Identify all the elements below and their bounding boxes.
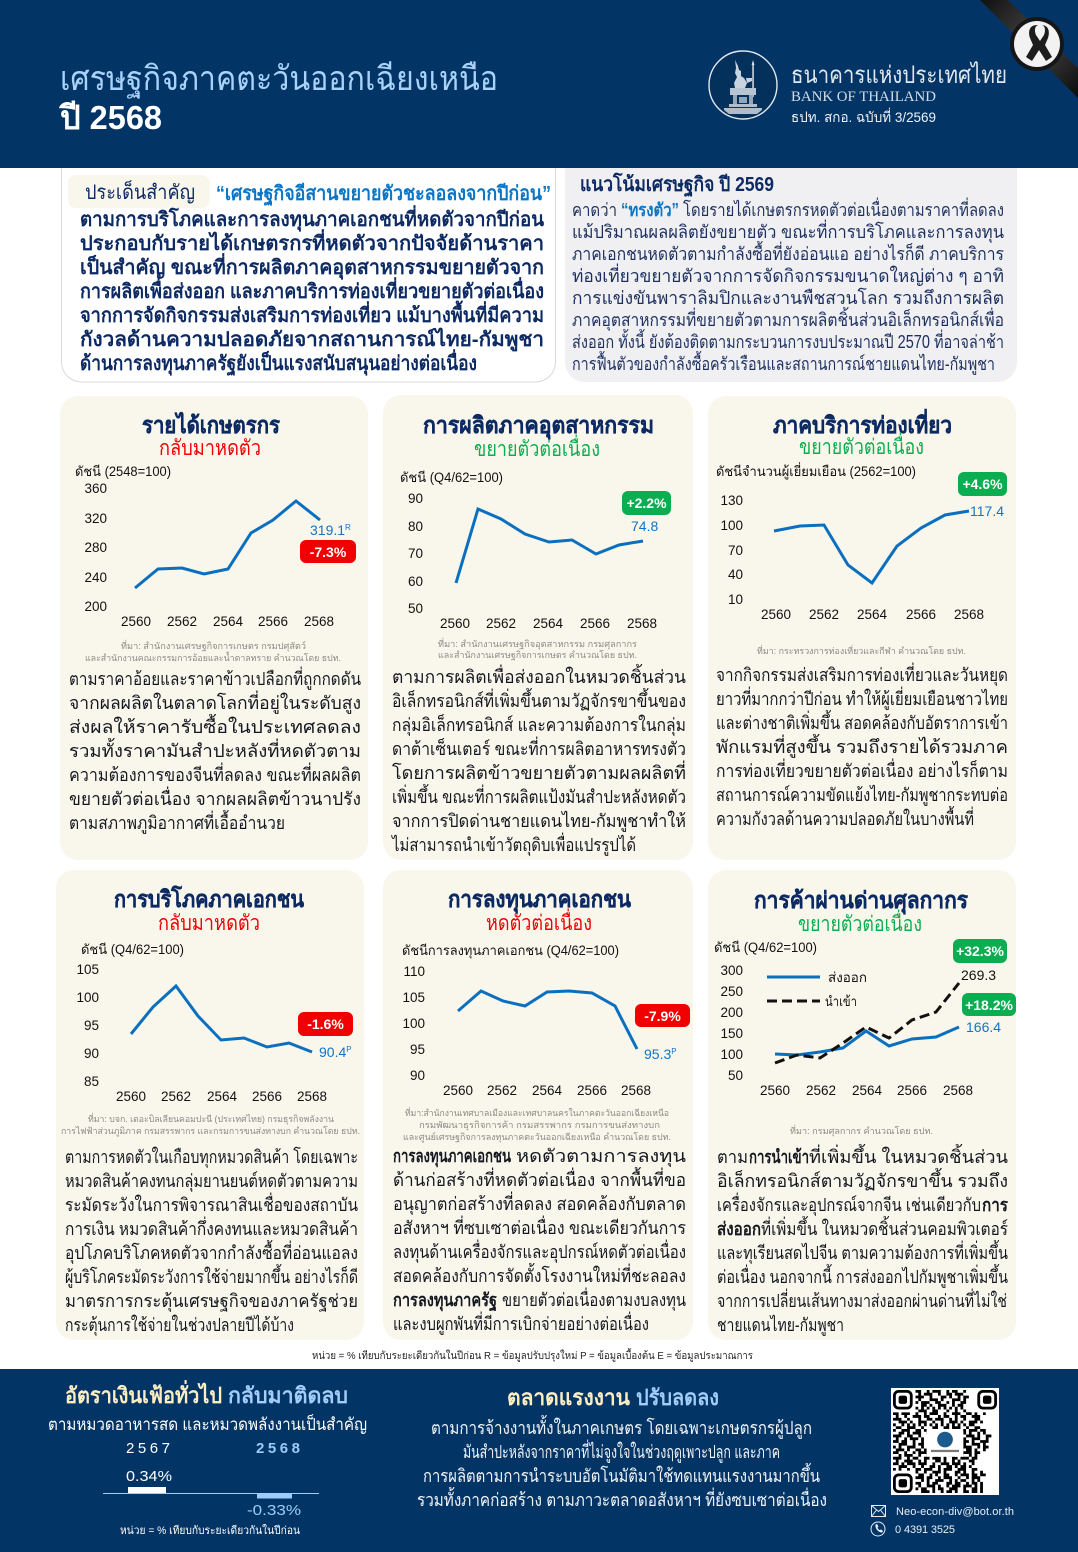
badge: plus 18.2 percent [962, 993, 1016, 1016]
body text: สถานการณ์ความขัดแย้งไทย-กัมพูชากระทบต่อ [716, 784, 1008, 806]
line chart: exports and imports: 300 [720, 963, 743, 978]
source note: ที่มา: สำนักงานเศรษฐกิจอุตสาหกรรม กรมศุลกากร [438, 637, 637, 650]
line chart: consumption index: 90 [84, 1046, 99, 1061]
footnote: units: หน่วย = % เทียบกับระยะเดียวกันในปีก่อน R = ข้อมูลปรับปรุงใหม่ P = ข้อมูลเบื้องต้น E = ข้อมูลประมาณการ [312, 1348, 753, 1362]
labor market text: มันสำปะหลังจากราคาที่ไม่จูงใจในช่วงฤดูเพาะปลูก และภาค [463, 1439, 780, 1463]
line chart: visitor index: 130 [720, 493, 743, 508]
panel: key points [62, 120, 556, 382]
line chart: farm income index: 360 [84, 481, 107, 496]
line chart: investment index: 2566 [577, 1083, 607, 1098]
body text: ต่อเนื่อง นอกจากนี้ การส่งออกไปกัมพูชาเพิ่มขึ้น [717, 1264, 1008, 1288]
body text: อิเล็กทรอนิกส์ตามวัฏจักรขาขึ้น รวมถึง [717, 1168, 1008, 1191]
body text: การลงทุนภาคเอกชน [393, 1146, 512, 1168]
line chart: exports and imports: ดัชนี (Q4/62=100) [714, 940, 817, 955]
badge: minus 7.3 percent [300, 540, 356, 563]
line chart: exports and imports: 269.3 [961, 967, 996, 983]
body text: ส่งผลให้ราคารับซื้อในประเทศลดลง [69, 714, 361, 737]
line chart: farm income index: ดัชนี (2548=100) [75, 464, 171, 479]
labor market text [417, 1415, 827, 1510]
line chart: farm income index: 240 [84, 570, 107, 585]
labor market heading [507, 1385, 719, 1410]
line chart: consumption index: 2566 [252, 1089, 282, 1104]
badge: minus 7.9 percent [635, 1004, 690, 1027]
line chart: visitor index: 117.4 [970, 503, 1004, 519]
report title: ปี 2568 [59, 99, 162, 136]
line chart: investment index: 2568 [621, 1083, 651, 1098]
body text: จากกิจกรรมส่งเสริมการท่องเที่ยวและวันหยุด [716, 662, 1008, 686]
tag: key points: ประเด็นสำคัญ [85, 179, 195, 204]
outlook text: ภาคเอกชนหดตัวตามกำลังซื้อที่ยังอ่อนแอ อย่างไรก็ดี ภาคบริการ [572, 241, 1004, 264]
bar chart: inflation: 0.34% [126, 1468, 172, 1485]
line chart: exports and imports: 250 [720, 984, 743, 999]
body text: ตามการผลิตเพื่อส่งออกในหมวดชิ้นส่วน [392, 664, 686, 687]
qr code [891, 1388, 999, 1495]
body text: ตามการหดตัวในเกือบทุกหมวดสินค้า โดยเฉพาะ [65, 1146, 358, 1168]
line chart: farm income index: 320 [84, 511, 107, 526]
inflation block [48, 1379, 367, 1537]
line chart: visitor index: 2568 [954, 607, 984, 622]
badge: minus 1.6 percent [298, 1012, 353, 1036]
heading: farm income [142, 411, 281, 460]
line chart: farm income index: 319.1 [310, 522, 345, 538]
key points text: จากการจัดกิจกรรมส่งเสริมการท่องเที่ยว แม้บางพื้นที่มีความ [80, 300, 544, 327]
key points text: ตามการบริโภคและการลงทุนภาคเอกชนที่หดตัวจากปีก่อน [80, 204, 544, 232]
contact: email: Neo-econ-div@bot.or.th [896, 1506, 1014, 1518]
line chart: consumption index: 2568 [297, 1089, 327, 1104]
footer band [0, 1369, 1078, 1552]
line chart: consumption index: 90.4 [319, 1044, 346, 1060]
bank name: BANK OF THAILAND [791, 89, 936, 105]
body text: อิเล็กทรอนิกส์ที่เพิ่มขึ้นตามวัฏจักรขาขึ้นของ [392, 688, 686, 711]
body text: ผู้บริโภคระมัดระวังการใช้จ่ายมากขึ้น อย่างไรก็ดี [65, 1264, 358, 1288]
labor market text: การผลิตตามการนำระบบอัตโนมัติมาใช้ทดแทนแรงงานมากขึ้น [423, 1463, 820, 1486]
line chart: visitor index: 2566 [906, 607, 936, 622]
line chart: consumption index [76, 942, 352, 1104]
badge: plus 32.3 percent [953, 939, 1007, 963]
line chart: consumption index: 2560 [116, 1089, 146, 1104]
line chart: exports and imports [714, 940, 1001, 1098]
body text: ไม่สามารถนำเข้าวัตถุดิบเพื่อแปรรูปได้ [390, 832, 636, 856]
source note: และศูนย์เศรษฐกิจการลงทุนภาคตะวันออกเฉียงเหนือ คำนวณโดย ธปท. [403, 1131, 671, 1143]
line chart: consumption index: 85 [84, 1074, 99, 1089]
icon: mourning ribbon [980, 0, 1078, 98]
line chart: farm income index: 280 [84, 540, 107, 555]
header banner [0, 0, 1078, 168]
line chart: investment index: ดัชนีการลงทุนภาคเอกชน (Q4/62=100) [402, 943, 619, 959]
line chart: visitor index [716, 462, 1004, 622]
body text: กระตุ้นการใช้จ่ายในช่วงปลายปีได้บ้าง [65, 1314, 294, 1336]
badge: plus 4.6 percent [958, 472, 1007, 496]
contact: phone [871, 1522, 955, 1536]
badge: plus 32.3 percent: +32.3% [956, 943, 1004, 959]
badge: minus 7.9 percent: -7.9% [644, 1008, 681, 1024]
body text: ยาวที่มากกว่าปีก่อน ทำให้ผู้เยี่ยมเยือนชาวไทย [716, 686, 1008, 710]
line chart: investment index: 2564 [532, 1083, 563, 1098]
key message: “เศรษฐกิจอีสานขยายตัวชะลอลงจากปีก่อน” [216, 182, 551, 207]
heading: private consumption: การบริโภคภาคเอกชน [114, 885, 304, 912]
body text: ความกังวลด้านความปลอดภัยในบางพื้นที่ [716, 806, 974, 829]
body text: ขยายตัวต่อเนื่องตามงบลงทุน [502, 1287, 686, 1311]
line chart: exports and imports: 150 [720, 1026, 743, 1041]
legend [767, 970, 867, 1009]
legend: นำเข้า [825, 994, 857, 1009]
outlook text: แม้ปริมาณผลผลิตยังขยายตัว ขณะที่การบริโภคและการลงทุน [572, 219, 1004, 243]
line chart: exports and imports: 2564 [852, 1083, 883, 1098]
body text: สอดคล้องกับการจัดตั้งโรงงานใหม่ที่ชะลอลง [393, 1263, 686, 1286]
key points text: การผลิตเพื่อส่งออก และภาคบริการท่องเที่ยวขยายตัวต่อเนื่อง [80, 276, 544, 303]
heading: tourism services [773, 408, 952, 459]
legend: ส่งออก [828, 970, 867, 985]
line chart: visitor index: 2562 [809, 607, 839, 622]
line chart: investment index: P [671, 1047, 677, 1056]
body text [717, 1144, 1008, 1336]
body text: และงบผูกพันที่มีการเบิกจ่ายอย่างต่อเนื่อง [393, 1311, 649, 1335]
body text: ตาม [717, 1147, 748, 1167]
body text: ขยายตัวต่อเนื่อง จากผลผลิตข้าวนาปรัง [69, 786, 361, 809]
panel: border trade [708, 870, 1016, 1340]
bar chart: inflation: 2568 [256, 1440, 300, 1457]
line chart: farm income index [75, 464, 351, 629]
source note [85, 639, 341, 663]
line chart: consumption index: 105 [76, 962, 99, 977]
body text: อนุญาตก่อสร้างที่ลดลง สอดคล้องกับตลาด [393, 1191, 686, 1215]
line chart: farm income index: 2562 [167, 614, 197, 629]
body text: ระมัดระวังในการพิจารณาสินเชื่อของสถาบัน [65, 1192, 358, 1215]
body text [390, 664, 686, 856]
line chart: visitor index: ดัชนีจำนวนผู้เยี่ยมเยือน (2562=100) [716, 462, 916, 480]
heading: border trade [754, 887, 969, 936]
panel: farm income [60, 396, 368, 860]
line chart: consumption index: 100 [76, 990, 99, 1005]
outlook text: การแข่งขันพาราลิมปิกและงานพืชสวนโลก รวมถึงการผลิต [572, 287, 1004, 308]
source note: การไฟฟ้าส่วนภูมิภาค กรมสรรพากร และกรมการขนส่งทางบก คำนวณโดย ธปท. [61, 1126, 360, 1137]
line chart: manufacturing index: 74.8 [631, 518, 658, 534]
heading: private consumption [114, 885, 304, 935]
line chart: manufacturing index: 90 [408, 491, 423, 506]
body text: ที่เพิ่มขึ้น ในหมวดชิ้นส่วน [809, 1144, 1008, 1167]
line chart: investment index: 95 [410, 1042, 425, 1057]
key points text: ประกอบกับรายได้เกษตรกรที่หดตัวจากปัจจัยด้านราคา [80, 228, 544, 255]
body text: พักแรมที่สูงขึ้น รวมถึงรายได้รวมภาค [716, 734, 1008, 758]
heading: farm income: กลับมาหดตัว [159, 437, 261, 460]
body text: อสังหาฯ ที่ซบเซาต่อเนื่อง ขณะเดียวกันการ [393, 1215, 686, 1238]
panel: tourism services [708, 396, 1016, 860]
line chart: manufacturing index: 2564 [533, 616, 564, 631]
source note: กรมพัฒนาธุรกิจการค้า กรมสรรพากร กรมการขนส่งทางบก [419, 1120, 660, 1131]
labor market heading: ตลาดแรงงาน [507, 1385, 630, 1410]
bank name: ธปท. สกอ. ฉบับที่ 3/2569 [791, 108, 936, 125]
line chart: farm income index: R [345, 523, 351, 532]
outlook text: โดยรายได้เกษตรกรหดตัวต่อเนื่องตามราคาที่ลดลง [683, 197, 1004, 220]
line chart: farm income index: 2564 [213, 614, 244, 629]
line chart: manufacturing index: 2560 [440, 616, 470, 631]
body text: จากผลผลิตในตลาดโลกที่อยู่ในระดับสูง [69, 690, 361, 714]
badge: minus 7.3 percent: -7.3% [310, 544, 347, 560]
source note: ที่มา:สำนักงานเทศบาลเมืองและเทศบาลนครในภาคตะวันออกเฉียงเหนือ [405, 1106, 669, 1118]
line chart: manufacturing index: 70 [408, 546, 423, 561]
bar chart: inflation: -0.33% [247, 1502, 301, 1519]
line chart: investment index: 2560 [443, 1083, 473, 1098]
source note: และสำนักงานเศรษฐกิจการเกษตร คำนวณโดย ธปท. [438, 650, 637, 661]
inflation heading: อัตราเงินเฟ้อทั่วไป [65, 1379, 222, 1408]
heading: tourism services: ภาคบริการท่องเที่ยว [773, 408, 952, 438]
line chart: exports and imports: 100 [720, 1047, 743, 1062]
bar chart: inflation [103, 1440, 319, 1519]
line chart: exports and imports: 200 [720, 1005, 743, 1020]
body text [716, 662, 1008, 829]
line chart: manufacturing index: 50 [408, 601, 423, 616]
body text: จากการเปลี่ยนเส้นทางมาส่งออกผ่านด่านที่ไม่ใช่ [717, 1288, 1007, 1311]
badge: plus 2.2 percent: +2.2% [626, 495, 667, 511]
source note: ที่มา: กระทรวงการท่องเที่ยวและกีฬา คำนวณโดย ธปท. [757, 644, 966, 656]
line chart: consumption index: P [346, 1045, 352, 1054]
body text: ด้านก่อสร้างที่หดตัวต่อเนื่อง จากพื้นที่ขอ [393, 1167, 686, 1190]
badge: minus 1.6 percent: -1.6% [307, 1016, 344, 1032]
body text: การท่องเที่ยวขยายตัวต่อเนื่อง อย่างไรก็ตาม [716, 758, 1008, 781]
body text: ตามสภาพภูมิอากาศที่เอื้ออำนวย [69, 810, 285, 834]
outlook text: ภาคอุตสาหกรรมที่ขยายตัวตามการผลิตชิ้นส่วนอิเล็กทรอนิกส์เพื่อ [572, 307, 1004, 331]
line chart: manufacturing index: ดัชนี (Q4/62=100) [400, 470, 503, 485]
line chart: consumption index: 2562 [161, 1089, 191, 1104]
source note [403, 1106, 671, 1143]
line chart: consumption index: 95 [84, 1018, 99, 1033]
heading: private investment: หดตัวต่อเนื่อง [486, 908, 592, 935]
line chart: farm income index: 200 [84, 599, 107, 614]
heading: industrial production: ขยายตัวต่อเนื่อง [474, 434, 600, 461]
line chart: manufacturing index: 2562 [486, 616, 516, 631]
line chart: consumption index: ดัชนี (Q4/62=100) [81, 942, 184, 957]
contact: phone: 0 4391 3525 [895, 1524, 955, 1536]
bar chart: inflation: 2567 [126, 1440, 170, 1457]
body text: ส่งออก [717, 1219, 761, 1239]
body text: และทุเรียนสดไปจีน ตามความต้องการที่เพิ่มขึ้น [717, 1240, 1008, 1264]
line chart: manufacturing index: 60 [408, 574, 423, 589]
outlook text: ท่องเที่ยวขยายตัวจากการจัดกิจกรรมขนาดใหญ่ต่าง ๆ อาทิ [572, 263, 1004, 286]
line chart: investment index: 95.3 [644, 1046, 671, 1062]
line chart: exports and imports: 166.4 [966, 1019, 1001, 1035]
key points text: เป็นสำคัญ ขณะที่การผลิตภาคอุตสาหกรรมขยายตัวจาก [80, 252, 544, 280]
body text: ดาต้าเซ็นเตอร์ ขณะที่การผลิตอาหารทรงตัว [392, 736, 686, 759]
heading: border trade: ขยายตัวต่อเนื่อง [798, 909, 922, 936]
line chart: visitor index: 40 [728, 567, 743, 582]
panel: private investment [383, 870, 693, 1340]
body text: ที่เพิ่มขึ้น ในหมวดชิ้นส่วนคอมพิวเตอร์ [761, 1216, 1008, 1239]
body text: ชายแดนไทย-กัมพูชา [717, 1314, 844, 1336]
panel: outlook 2569 [565, 168, 1017, 382]
line chart: visitor index: 10 [728, 592, 743, 607]
heading: private consumption: กลับมาหดตัว [158, 912, 260, 935]
source note: ที่มา: กรมศุลกากร คำนวณโดย ธปท. [790, 1124, 933, 1137]
body text: หมวดสินค้าคงทนกลุ่มยานยนต์หดตัวตามความ [65, 1171, 358, 1192]
labor market text: ตามการจ้างงานทั้งในภาคเกษตร โดยเฉพาะเกษตรกรผู้ปลูก [431, 1415, 812, 1439]
outlook text: คาดว่า [572, 200, 617, 220]
source note [438, 637, 637, 661]
body text: รวมทั้งราคามันสำปะหลังที่หดตัวตาม [69, 738, 361, 761]
body text: หดตัวตามการลงทุน [516, 1146, 686, 1167]
bank name [791, 61, 1007, 125]
heading: private investment: การลงทุนภาคเอกชน [448, 886, 631, 914]
tag: key points [68, 175, 210, 208]
line chart: investment index: 110 [403, 964, 425, 979]
labor market heading: ปรับลดลง [636, 1385, 719, 1410]
source note: และสำนักงานคณะกรรมการอ้อยและน้ำตาลทราย คำนวณโดย ธปท. [85, 651, 341, 663]
inflation subheading: ตามหมวดอาหารสด และหมวดพลังงานเป็นสำคัญ [48, 1413, 367, 1434]
line chart: exports and imports: 2566 [897, 1083, 927, 1098]
line chart: exports and imports: 2560 [760, 1083, 790, 1098]
body text: เครื่องจักรและอุปกรณ์จากจีน เช่นเดียวกับ [717, 1192, 981, 1216]
body text: ตามราคาอ้อยและราคาข้าวเปลือกที่ถูกกดดัน [69, 666, 361, 690]
badge: plus 2.2 percent [622, 491, 671, 515]
badge: plus 18.2 percent: +18.2% [965, 997, 1013, 1013]
body text: โดยการผลิตข้าวขยายตัวตามผลผลิตที่ [392, 760, 686, 783]
line chart: visitor index: 2564 [857, 607, 888, 622]
body text [393, 1146, 686, 1335]
heading: industrial production: การผลิตภาคอุตสาหกรรม [423, 412, 654, 440]
labor market block [417, 1385, 827, 1510]
line chart: manufacturing index: 2566 [580, 616, 610, 631]
body text: มาตรการกระตุ้นเศรษฐกิจของภาครัฐช่วย [65, 1291, 358, 1312]
report title [59, 60, 498, 136]
outlook text: “ทรงตัว” [621, 200, 679, 220]
line chart: farm income index: 2566 [258, 614, 288, 629]
body text: ลงทุนด้านเครื่องจักรและอุปกรณ์หดตัวต่อเนื่อง [393, 1239, 686, 1263]
body text: เพิ่มขึ้น ขณะที่การผลิตแป้งมันสำปะหลังหดตัว [392, 784, 686, 807]
line chart: exports and imports: 2568 [943, 1083, 973, 1098]
body text: การนำเข้า [749, 1147, 809, 1167]
inflation heading [65, 1379, 348, 1408]
line chart: exports and imports: 50 [728, 1068, 743, 1083]
body text: การลงทุนภาครัฐ [393, 1290, 497, 1312]
body text: การเงิน หมวดสินค้ากึ่งคงทนและหมวดสินค้า [65, 1216, 358, 1239]
line chart: investment index: 105 [402, 990, 425, 1005]
line chart: visitor index: 100 [720, 518, 743, 533]
source note [61, 1112, 360, 1137]
panel: industrial production [383, 395, 693, 860]
badge: plus 4.6 percent: +4.6% [962, 476, 1003, 492]
line chart: investment index: 2562 [487, 1083, 517, 1098]
line chart: farm income index: 2560 [121, 614, 151, 629]
body text: ความต้องการของจีนที่ลดลง ขณะที่ผลผลิต [69, 762, 361, 785]
body text [69, 666, 361, 834]
key points text: ด้านการลงทุนภาครัฐยังเป็นแรงสนับสนุนอย่างต่อเนื่อง [80, 348, 477, 377]
key points text [80, 204, 544, 377]
body text: อุปโภคบริโภคหดตัวจากกำลังซื้อที่อ่อนแอลง [65, 1240, 358, 1264]
heading: private investment [448, 886, 631, 935]
report title: เศรษฐกิจภาคตะวันออกเฉียงเหนือ [60, 60, 498, 99]
body text: และต่างชาติเพิ่มขึ้น สอดคล้องกับอัตราการเข้า [716, 710, 1008, 733]
source note: ที่มา: บจก. เดอะบิลเลียนคอมปะนี (ประเทศไทย) กรมธุรกิจพลังงาน [88, 1112, 334, 1125]
line chart: exports and imports: 2562 [806, 1083, 836, 1098]
line chart: investment index [402, 943, 677, 1098]
body text: กลุ่มอิเล็กทรอนิกส์ และความต้องการในกลุ่ม [392, 713, 686, 736]
heading: tourism services: ขยายตัวต่อเนื่อง [799, 432, 924, 459]
line chart: investment index: 90 [410, 1068, 425, 1083]
bank name: ธนาคารแห่งประเทศไทย [791, 61, 1007, 89]
outlook text [572, 197, 1004, 375]
line chart: manufacturing index [400, 470, 658, 631]
line chart: manufacturing index: 80 [408, 519, 423, 534]
panel: private consumption [56, 870, 364, 1340]
line chart: consumption index: 2564 [207, 1089, 238, 1104]
body text [65, 1146, 358, 1336]
outlook heading: แนวโน้มเศรษฐกิจ ปี 2569 [580, 172, 774, 198]
source note: ที่มา: สำนักงานเศรษฐกิจการเกษตร กรมปศุสัตว์ [121, 639, 306, 652]
icon: bank of thailand emblem [709, 51, 777, 119]
inflation unit note: หน่วย = % เทียบกับระยะเดียวกันในปีก่อน [120, 1524, 300, 1537]
heading: farm income: รายได้เกษตรกร [142, 411, 281, 438]
inflation heading: กลับมาติดลบ [228, 1383, 348, 1408]
body text: จากการปิดด่านชายแดนไทย-กัมพูชาทำให้ [392, 810, 686, 832]
body text: การ [982, 1195, 1008, 1215]
line chart: manufacturing index: 2568 [627, 616, 657, 631]
line chart: visitor index: 2560 [761, 607, 791, 622]
heading: border trade: การค้าผ่านด่านศุลกากร [754, 887, 969, 915]
labor market text: รวมทั้งภาคก่อสร้าง ตามภาวะตลาดอสังหาฯ ที่ยังซบเซาต่อเนื่อง [417, 1487, 827, 1510]
heading: industrial production [423, 412, 654, 461]
line chart: investment index: 100 [402, 1016, 425, 1031]
line chart: visitor index: 70 [728, 543, 743, 558]
key points text: กังวลด้านความปลอดภัยจากสถานการณ์ไทย-กัมพูชา [80, 327, 544, 353]
line chart: farm income index: 2568 [304, 614, 334, 629]
